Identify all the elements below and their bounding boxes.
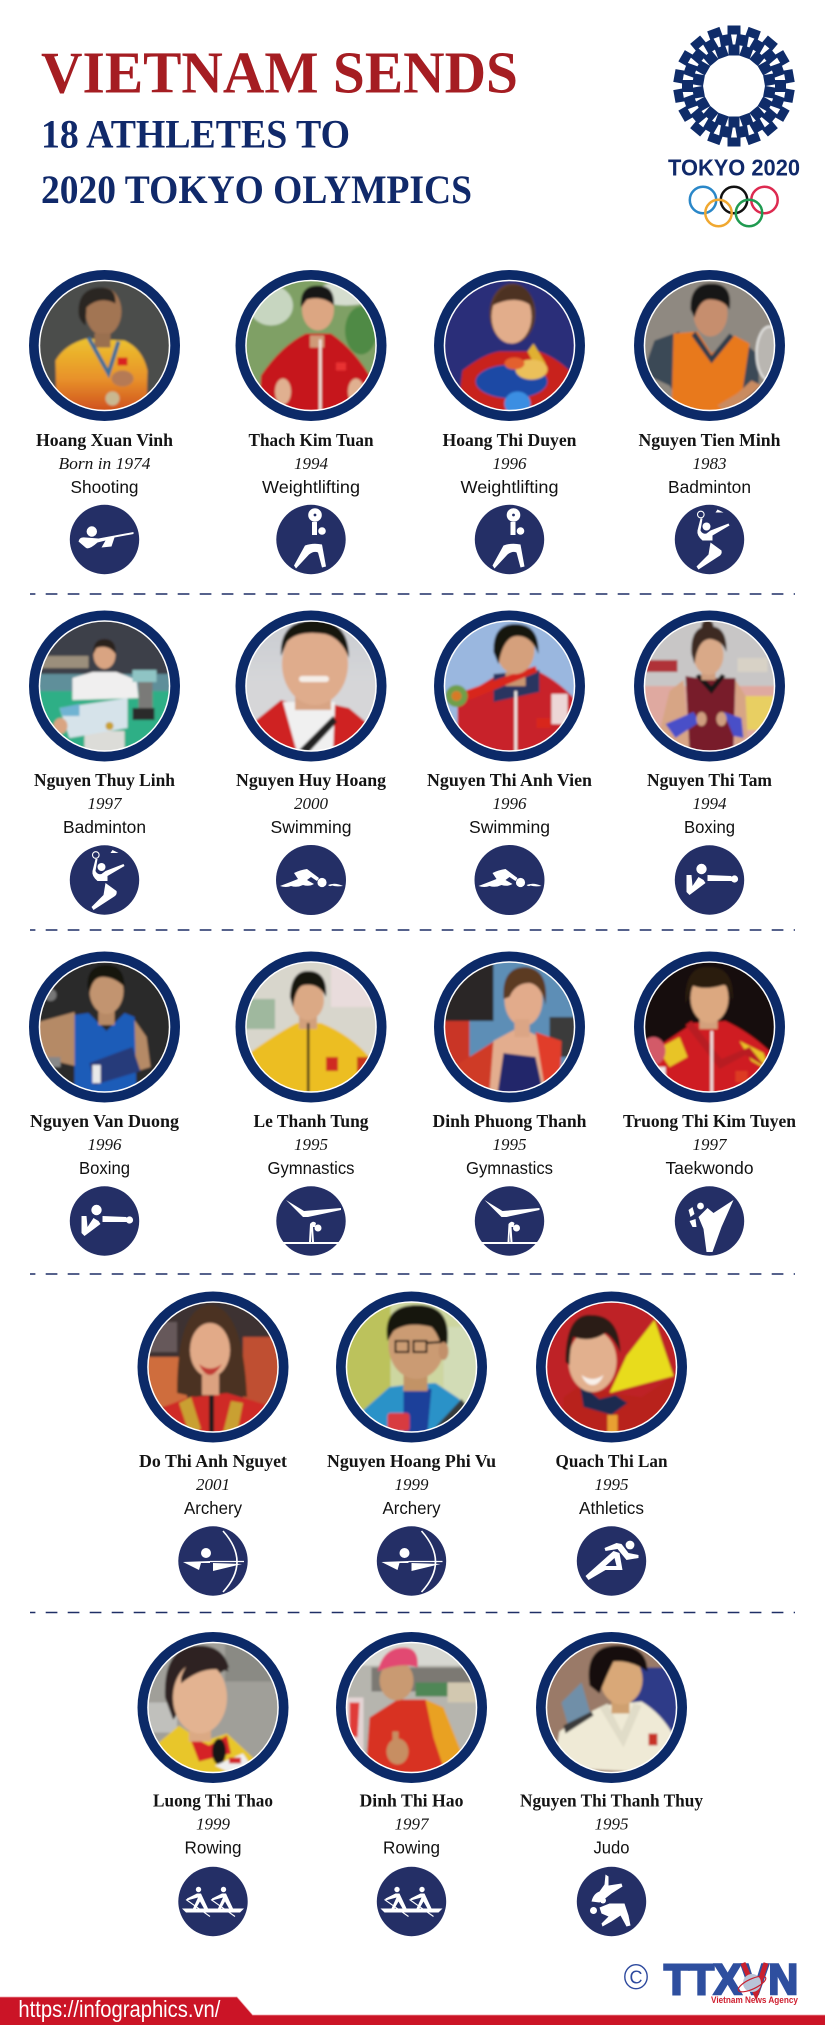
athlete: Dinh Phuong Thanh [432, 952, 587, 1256]
icon: copyright: C [630, 1968, 642, 1988]
birth year: 1999 [394, 1475, 429, 1494]
heading: 18 athletes to: 18 ATHLETES TO [41, 112, 350, 157]
portrait: Truong Thi Kim Tuyen [634, 952, 785, 1102]
name: Nguyen Hoang Phi Vu [327, 1451, 496, 1471]
portrait: Hoang Thi Duyen [434, 270, 585, 421]
sport: Weightlifting [460, 477, 558, 497]
footer bar [0, 1996, 825, 2025]
athlete: Nguyen Thi Anh Vien [427, 610, 592, 915]
icon: boxing [70, 1186, 139, 1256]
portrait: Nguyen Thi Thanh Thuy [536, 1632, 687, 1783]
athlete: Nguyen Tien Minh [634, 270, 785, 574]
sport: Boxing [684, 817, 735, 837]
sport: Shooting [70, 477, 138, 497]
birth year: 2000 [294, 794, 328, 813]
name: Nguyen Thi Anh Vien [427, 770, 592, 790]
birth year: 1996 [492, 454, 527, 473]
portrait: Nguyen Thi Tam [634, 610, 785, 762]
athlete: Nguyen Hoang Phi Vu [327, 1292, 496, 1596]
footer url: https://infographics.vn/ [18, 1996, 221, 2022]
portrait: Do Thi Anh Nguyet [138, 1292, 288, 1442]
icon: weightlifting [276, 505, 346, 574]
sport: Gymnastics [268, 1158, 355, 1178]
icon: archery [178, 1526, 248, 1596]
athlete: Do Thi Anh Nguyet [138, 1292, 288, 1596]
name: Do Thi Anh Nguyet [139, 1451, 287, 1471]
athlete: Nguyen Huy Hoang [236, 610, 386, 915]
athlete: Luong Thi Thao [138, 1632, 288, 1936]
portrait: Dinh Thi Hao [336, 1632, 487, 1783]
icon: olympic rings [690, 187, 778, 226]
birth year: 1996 [88, 1135, 122, 1154]
icon: gymnastics [475, 1186, 544, 1256]
name: Hoang Thi Duyen [442, 430, 577, 450]
icon: badminton [70, 845, 139, 915]
icon: checkered ring [672, 24, 796, 148]
name: Dinh Thi Hao [360, 1790, 464, 1810]
name: Nguyen Thi Thanh Thuy [520, 1790, 703, 1810]
portrait: Nguyen Thi Anh Vien [434, 610, 585, 762]
birth year: 1997 [394, 1814, 430, 1834]
birth year: 1995 [294, 1135, 328, 1154]
icon: rowing [178, 1867, 248, 1936]
name: Thach Kim Tuan [248, 430, 374, 450]
portrait: Nguyen Huy Hoang [236, 610, 386, 762]
sport: Swimming [270, 817, 352, 837]
heading: 2020 Tokyo Olympics: 2020 TOKYO OLYMPICS [41, 167, 472, 212]
logo: Tokyo 2020 [668, 24, 800, 226]
birth year: 1999 [196, 1814, 230, 1834]
athlete: Nguyen Thi Thanh Thuy [520, 1632, 703, 1936]
name: Hoang Xuan Vinh [36, 430, 173, 450]
athlete: Nguyen Van Duong [29, 952, 180, 1256]
sport: Rowing [383, 1838, 440, 1858]
icon: copyright [625, 1965, 647, 1989]
sport: Gymnastics [466, 1158, 553, 1178]
birth year: 1997 [88, 794, 123, 813]
icon: archery [377, 1526, 446, 1596]
sport: Swimming [469, 817, 550, 837]
title [41, 40, 518, 212]
athlete: Le Thanh Tung [236, 952, 386, 1256]
athlete: Nguyen Thi Tam [634, 610, 785, 915]
sport: Archery [184, 1498, 242, 1518]
icon: swimming [474, 845, 544, 915]
portrait: Luong Thi Thao [138, 1632, 288, 1783]
name: Nguyen Huy Hoang [236, 770, 386, 790]
name: Nguyen Tien Minh [638, 430, 781, 450]
name: Nguyen Van Duong [30, 1111, 179, 1131]
icon: weightlifting [475, 505, 544, 574]
birth year: 1997 [692, 1135, 728, 1154]
icon: athletics [577, 1526, 646, 1596]
icon: swimming [276, 845, 346, 915]
icon: judo [577, 1867, 646, 1936]
logo: TTXVN agency [625, 1956, 798, 2005]
portrait: Nguyen Thuy Linh [29, 610, 180, 762]
athlete: Nguyen Thuy Linh [29, 610, 180, 915]
icon: rowing [377, 1867, 446, 1936]
portrait: Nguyen Tien Minh [634, 270, 785, 421]
logo text: TOKYO 2020 [668, 155, 800, 181]
portrait: Hoang Xuan Vinh [29, 270, 180, 421]
sport: Weightlifting [262, 477, 360, 497]
name: Dinh Phuong Thanh [432, 1111, 587, 1131]
portrait: Nguyen Hoang Phi Vu [336, 1292, 487, 1442]
portrait: Quach Thi Lan [536, 1292, 687, 1442]
agency caption: Vietnam News Agency [711, 1995, 798, 2005]
birth year: 1996 [492, 794, 527, 813]
icon: taekwondo [675, 1186, 744, 1256]
name: Quach Thi Lan [556, 1451, 668, 1471]
athlete: Thach Kim Tuan [236, 270, 386, 574]
portrait: Thach Kim Tuan [236, 270, 386, 421]
portrait: Dinh Phuong Thanh [434, 952, 585, 1102]
birth year: 1995 [594, 1814, 628, 1834]
athlete: Truong Thi Kim Tuyen [623, 952, 796, 1256]
birth year: 1995 [594, 1475, 628, 1494]
icon: shooting [70, 505, 139, 574]
heading: Vietnam sends: VIETNAM SENDS [41, 40, 518, 106]
sport: Rowing [184, 1838, 242, 1858]
sport: Judo [594, 1838, 630, 1858]
athlete: Hoang Xuan Vinh [29, 270, 180, 574]
portrait: Le Thanh Tung [236, 952, 386, 1102]
icon: boxing [675, 845, 744, 915]
name: Luong Thi Thao [153, 1790, 273, 1810]
sport: Archery [382, 1498, 441, 1518]
name: Truong Thi Kim Tuyen [623, 1111, 796, 1131]
athlete: Hoang Thi Duyen [434, 270, 585, 574]
name: Le Thanh Tung [254, 1111, 369, 1131]
sport: Badminton [63, 817, 146, 837]
birth year: 1994 [294, 454, 328, 473]
portrait: Nguyen Van Duong [29, 952, 180, 1102]
birth year: Born in 1974 [58, 454, 151, 473]
birth year: 2001 [196, 1475, 230, 1494]
birth year: 1995 [492, 1135, 526, 1154]
sport: Taekwondo [666, 1158, 754, 1178]
name: Nguyen Thi Tam [647, 770, 772, 790]
sport: Boxing [79, 1158, 130, 1178]
birth year: 1983 [692, 454, 726, 473]
sport: Athletics [579, 1498, 644, 1518]
icon: gymnastics [276, 1186, 346, 1256]
icon: badminton [675, 505, 744, 574]
name: Nguyen Thuy Linh [34, 770, 175, 790]
sport: Badminton [668, 477, 751, 497]
athlete: Quach Thi Lan [536, 1292, 687, 1596]
athlete: Dinh Thi Hao [336, 1632, 487, 1936]
agency wordmark: TTXVN [664, 1956, 798, 2004]
icon: globe [736, 1963, 768, 1995]
birth year: 1994 [692, 794, 727, 813]
